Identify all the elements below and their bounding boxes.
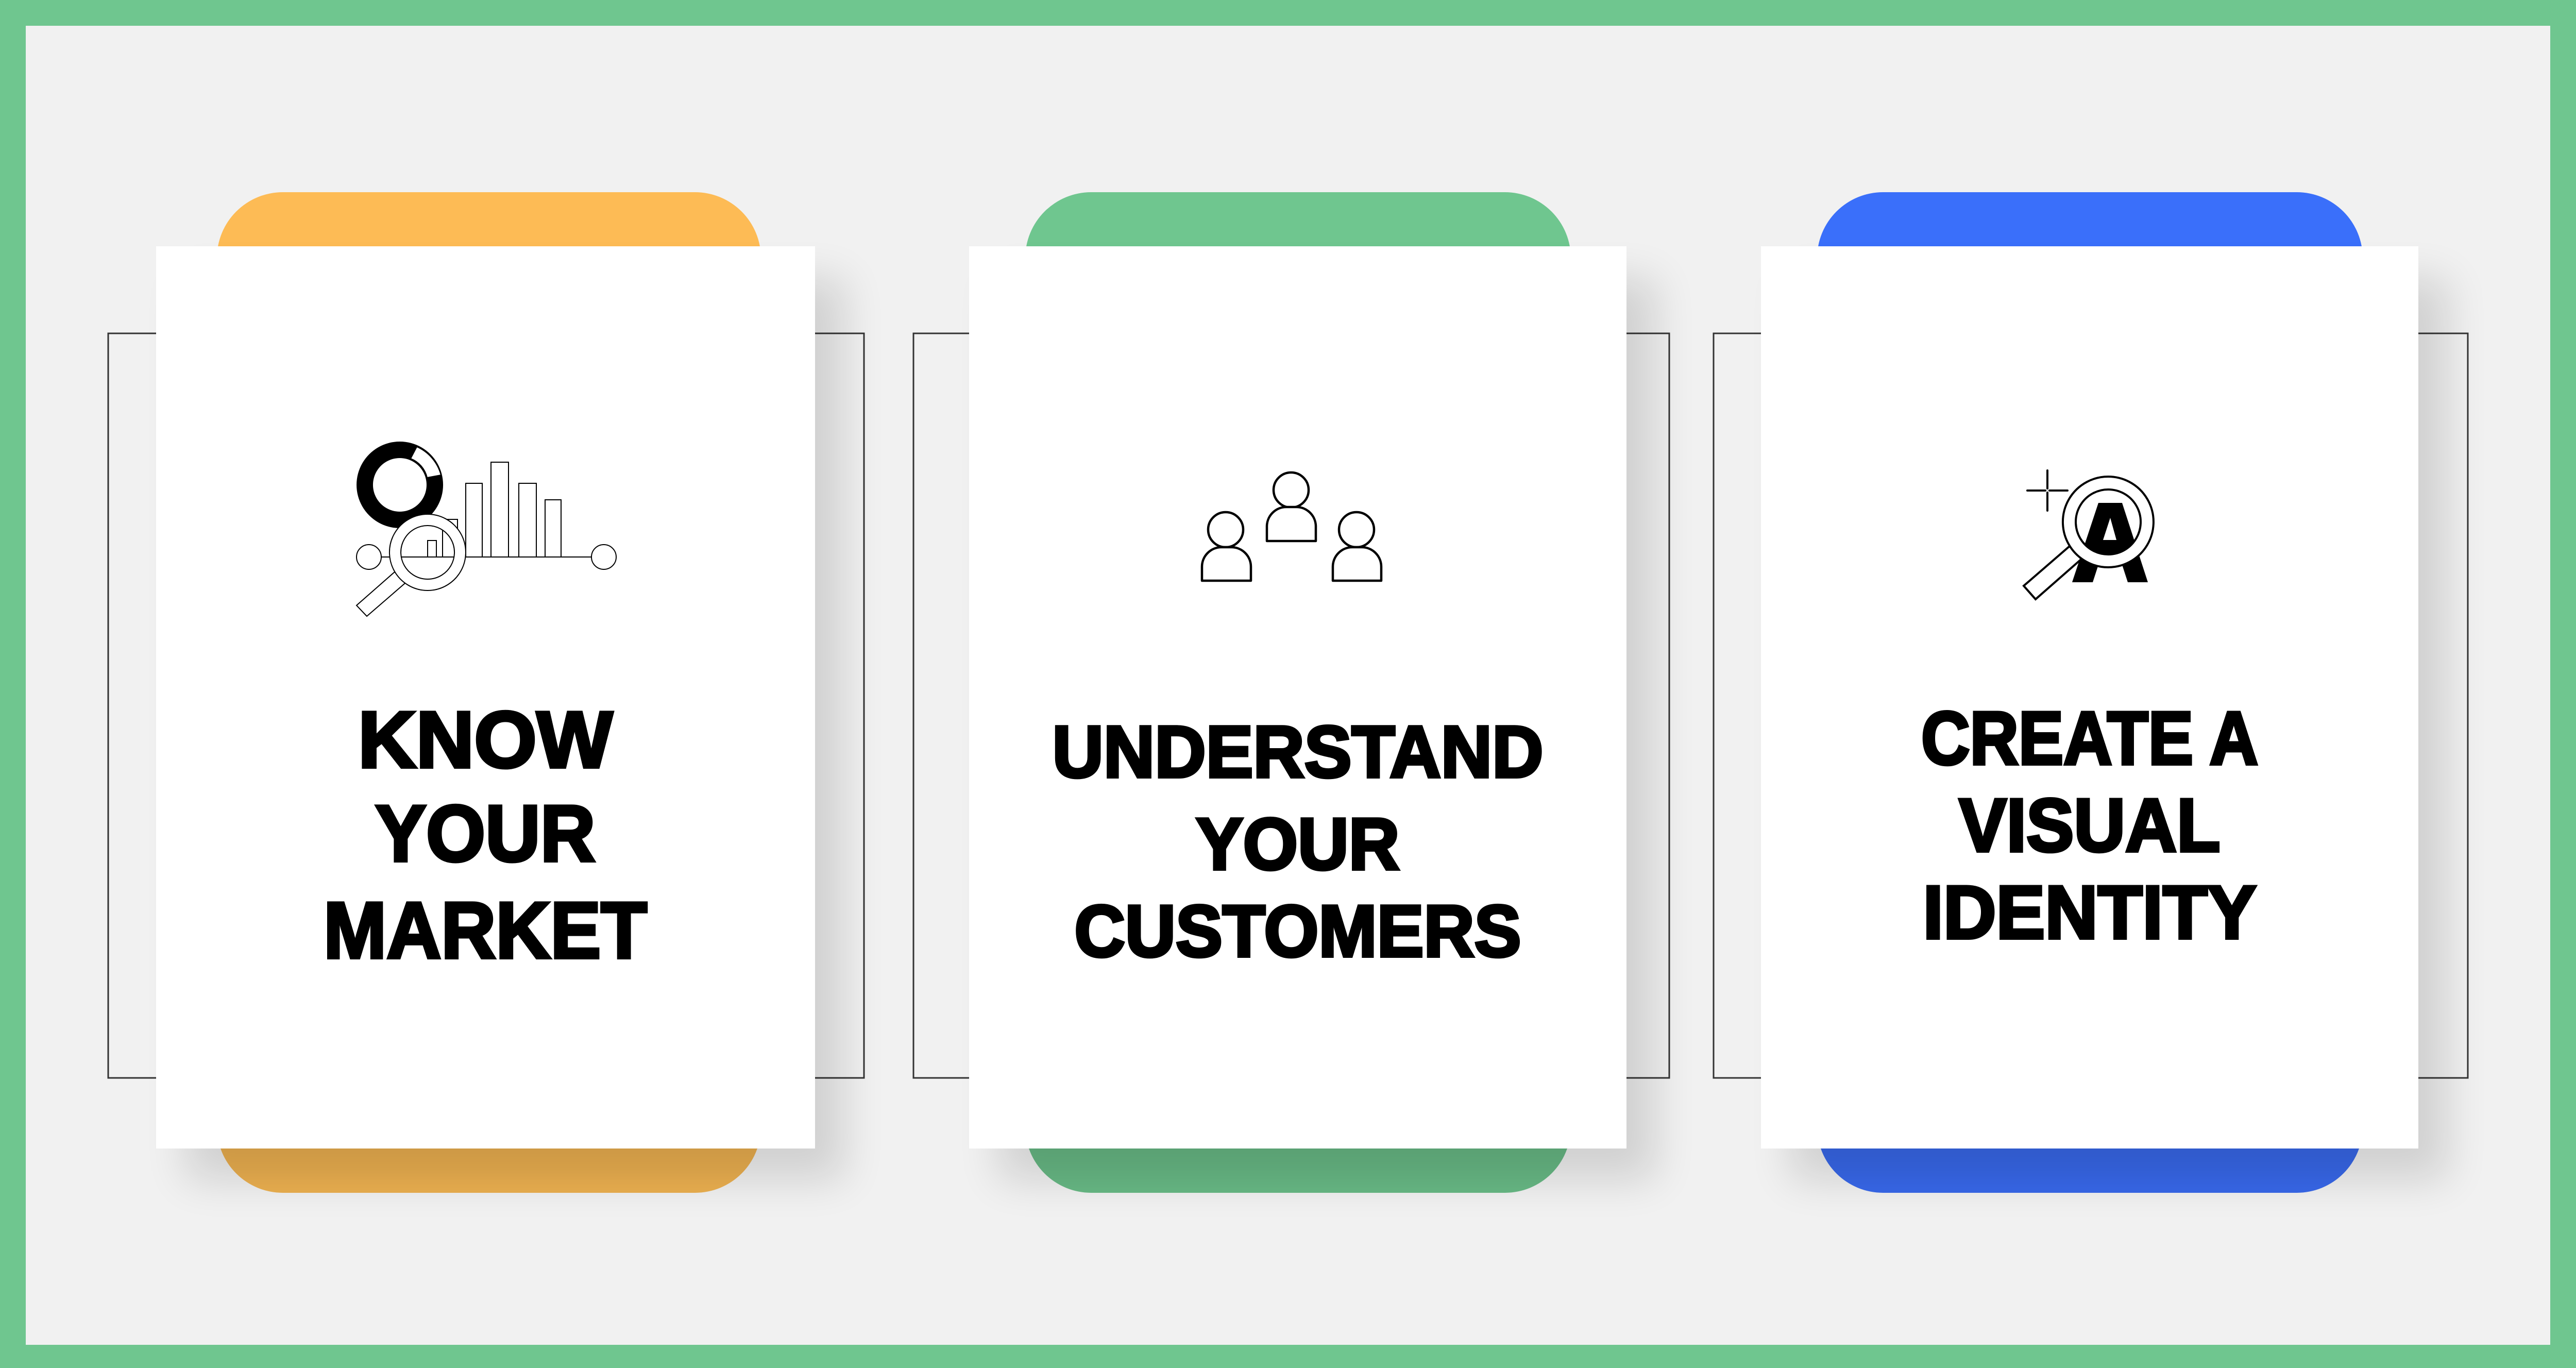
icon: magnifier over letter A [2024, 470, 2154, 599]
heading: understand your customers: YOUR [1196, 803, 1399, 885]
heading: know your market: YOUR [375, 789, 596, 878]
heading: know your market: KNOW [358, 695, 613, 784]
heading: create a visual identity [1921, 696, 2258, 954]
heading: know your market: MARKET [324, 886, 647, 975]
panel: know your market [108, 192, 864, 1193]
heading: understand your customers [1052, 711, 1544, 972]
panel: create a visual identity [1714, 192, 2468, 1193]
icon: market chart with magnifier [357, 442, 616, 616]
heading: create a visual identity: CREATE A [1921, 696, 2258, 780]
heading: create a visual identity: VISUAL [1959, 783, 2221, 867]
panel: understand your customers [913, 192, 1669, 1193]
heading: know your market [324, 695, 647, 975]
heading: understand your customers: CUSTOMERS [1075, 890, 1521, 972]
heading: understand your customers: UNDERSTAND [1052, 711, 1544, 793]
icon: three people [1202, 472, 1381, 581]
heading: create a visual identity: IDENTITY [1923, 870, 2257, 954]
